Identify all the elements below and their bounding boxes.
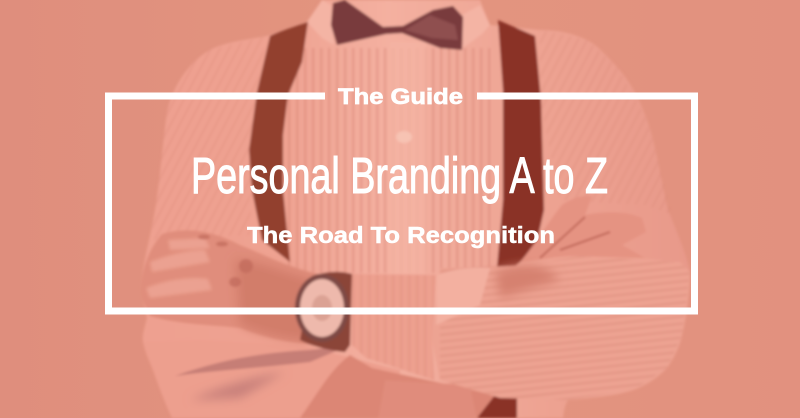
bow tie sheen: [405, 15, 458, 40]
watch strap: [300, 272, 352, 352]
collar left: [307, 0, 334, 45]
left hand and wrist: [141, 230, 325, 345]
label: The Guide: The Guide: [338, 84, 463, 109]
knuckle shadows: [198, 234, 253, 287]
watch face: [295, 274, 349, 342]
right hand fingers: [520, 196, 646, 262]
finger gaps: [540, 217, 610, 258]
shirt stripes: right sleeve: [540, 30, 673, 215]
bow tie: [331, 0, 463, 50]
shirt stripes: left sleeve: [150, 36, 267, 240]
shirt placket: [390, 42, 426, 274]
lower left arm shirt: [143, 340, 400, 418]
back of hand shade: [235, 260, 320, 340]
shadow fold lower: [190, 372, 285, 400]
suspender left: [249, 22, 308, 262]
lower shirt shade: [300, 355, 495, 418]
lower shirt right: [378, 380, 477, 418]
suspender lower right: [477, 395, 517, 418]
shirt cuff: [352, 274, 436, 380]
right forearm sleeve: [432, 256, 690, 400]
watch dial: [300, 279, 344, 337]
rolled sleeve edge: [436, 267, 490, 325]
frame: white rectangle with gap: [108, 96, 694, 311]
forearm shade: [495, 265, 560, 298]
shirt stripes: shirt front: [288, 48, 496, 273]
subtitle: The Road To Recognition: [247, 222, 555, 248]
title: Personal Branding A to Z: [191, 147, 608, 204]
suspender right: [497, 20, 544, 270]
collar right: [462, 5, 490, 48]
shirt body: [141, 0, 690, 418]
forearm stripes: [440, 256, 690, 400]
photo: man with crossed arms: [141, 0, 690, 418]
finger highlights: [146, 238, 212, 298]
shadow fold: [175, 345, 350, 376]
watch center: [312, 295, 332, 321]
cuff stripes: [352, 274, 436, 380]
shirt button: [396, 131, 412, 143]
